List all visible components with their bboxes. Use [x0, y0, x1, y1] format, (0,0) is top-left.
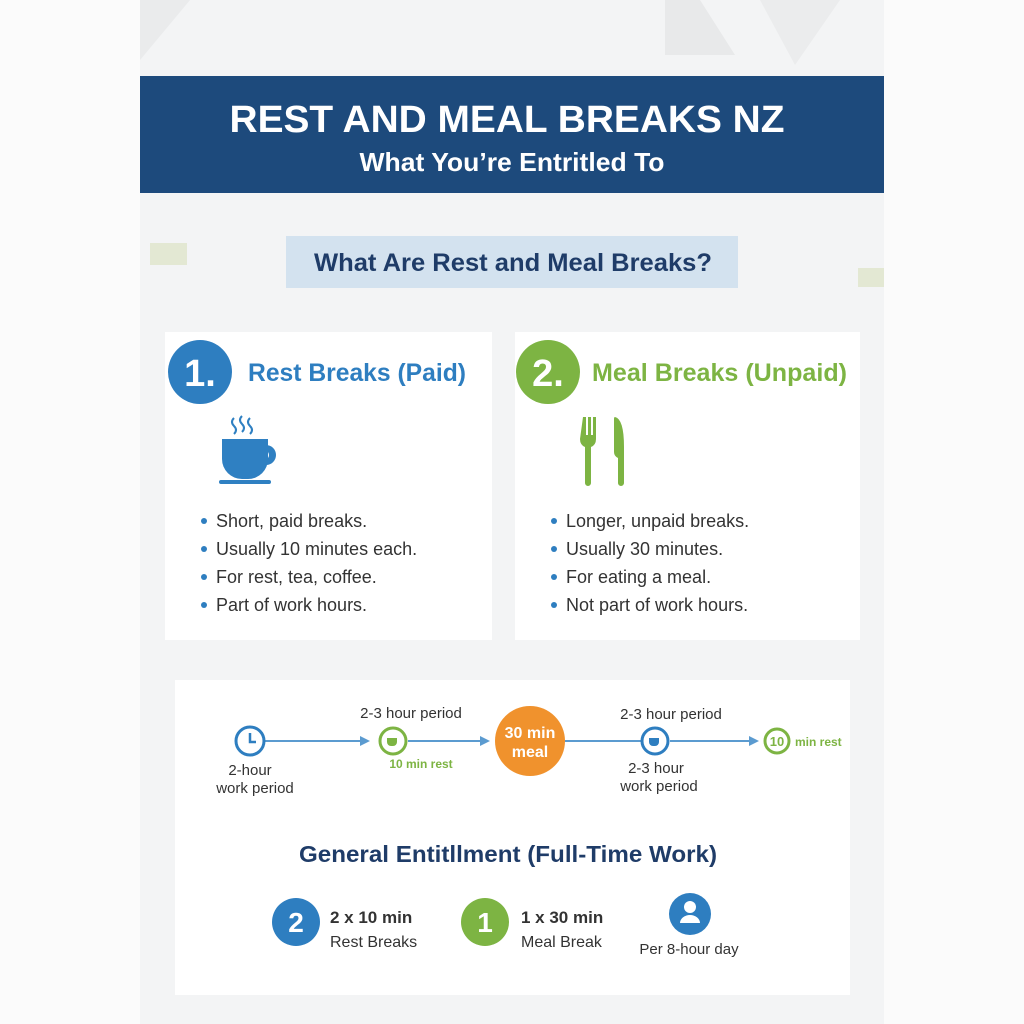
stat: per day: Per 8-hour day [639, 941, 739, 958]
stat: meal break: 1 x 30 min [521, 908, 603, 927]
bullet list: rest: Short, paid breaks. [216, 511, 367, 531]
heading: general entitlement: General Entitllment (Full-Time Work) [299, 841, 717, 867]
stat: rest breaks: 2 x 10 min [330, 908, 412, 927]
bullet list: meal: Longer, unpaid breaks. [566, 511, 749, 531]
icon: coffee cup [219, 416, 276, 484]
subtitle: What You’re Entritled To [360, 147, 664, 177]
bullet list: rest: For rest, tea, coffee. [216, 567, 377, 587]
heading: meal breaks: Meal Breaks (Unpaid) [592, 359, 847, 387]
number badge 2 [516, 340, 580, 404]
bullet list: rest: Part of work hours. [216, 595, 367, 615]
panel: meal breaks [515, 332, 860, 640]
meal circle [495, 706, 565, 776]
timeline: work period [215, 780, 294, 797]
stat: per day [639, 893, 739, 958]
timeline: 2-3 hour period [620, 706, 722, 723]
panel: timeline and entitlement [175, 680, 850, 995]
timeline: 2-3 hour period [360, 705, 462, 722]
timeline: 2-3 hour [628, 760, 684, 777]
end rest marker: 10 [770, 734, 784, 749]
timeline: 2-hour [228, 762, 272, 779]
timeline [215, 705, 842, 797]
icon: green cup [380, 728, 406, 754]
bullet list: meal: For eating a meal. [566, 567, 711, 587]
end rest marker: min rest [795, 735, 842, 749]
meal circle: meal [512, 744, 548, 761]
stat: rest breaks [272, 898, 417, 951]
bullet list: meal: Not part of work hours. [566, 595, 748, 615]
title: REST AND MEAL BREAKS NZ [230, 99, 784, 141]
section heading [286, 236, 738, 288]
stat: rest breaks: 2 [288, 907, 304, 938]
header banner [140, 76, 884, 193]
stat: meal break [461, 898, 603, 951]
stat: meal break: 1 [477, 907, 493, 938]
bullet list: rest: Usually 10 minutes each. [216, 539, 417, 559]
number badge 2: 2. [532, 353, 564, 395]
icon: blue cup [642, 728, 668, 754]
bullet list: meal [551, 511, 749, 615]
stat: meal break: Meal Break [521, 934, 603, 951]
icon: clock [236, 727, 264, 755]
stat: rest breaks: Rest Breaks [330, 934, 417, 951]
section heading: What Are Rest and Meal Breaks? [314, 249, 712, 277]
number badge 1 [168, 340, 232, 404]
end rest marker [765, 729, 842, 753]
number badge 1: 1. [184, 353, 216, 395]
icon: fork and knife [580, 417, 624, 486]
timeline: work period [619, 778, 698, 795]
bullet list: rest [201, 511, 417, 615]
heading: rest breaks: Rest Breaks (Paid) [248, 359, 466, 387]
timeline: 10 min rest [389, 757, 453, 771]
bullet list: meal: Usually 30 minutes. [566, 539, 723, 559]
panel: rest breaks [165, 332, 492, 640]
meal circle: 30 min [505, 725, 555, 742]
